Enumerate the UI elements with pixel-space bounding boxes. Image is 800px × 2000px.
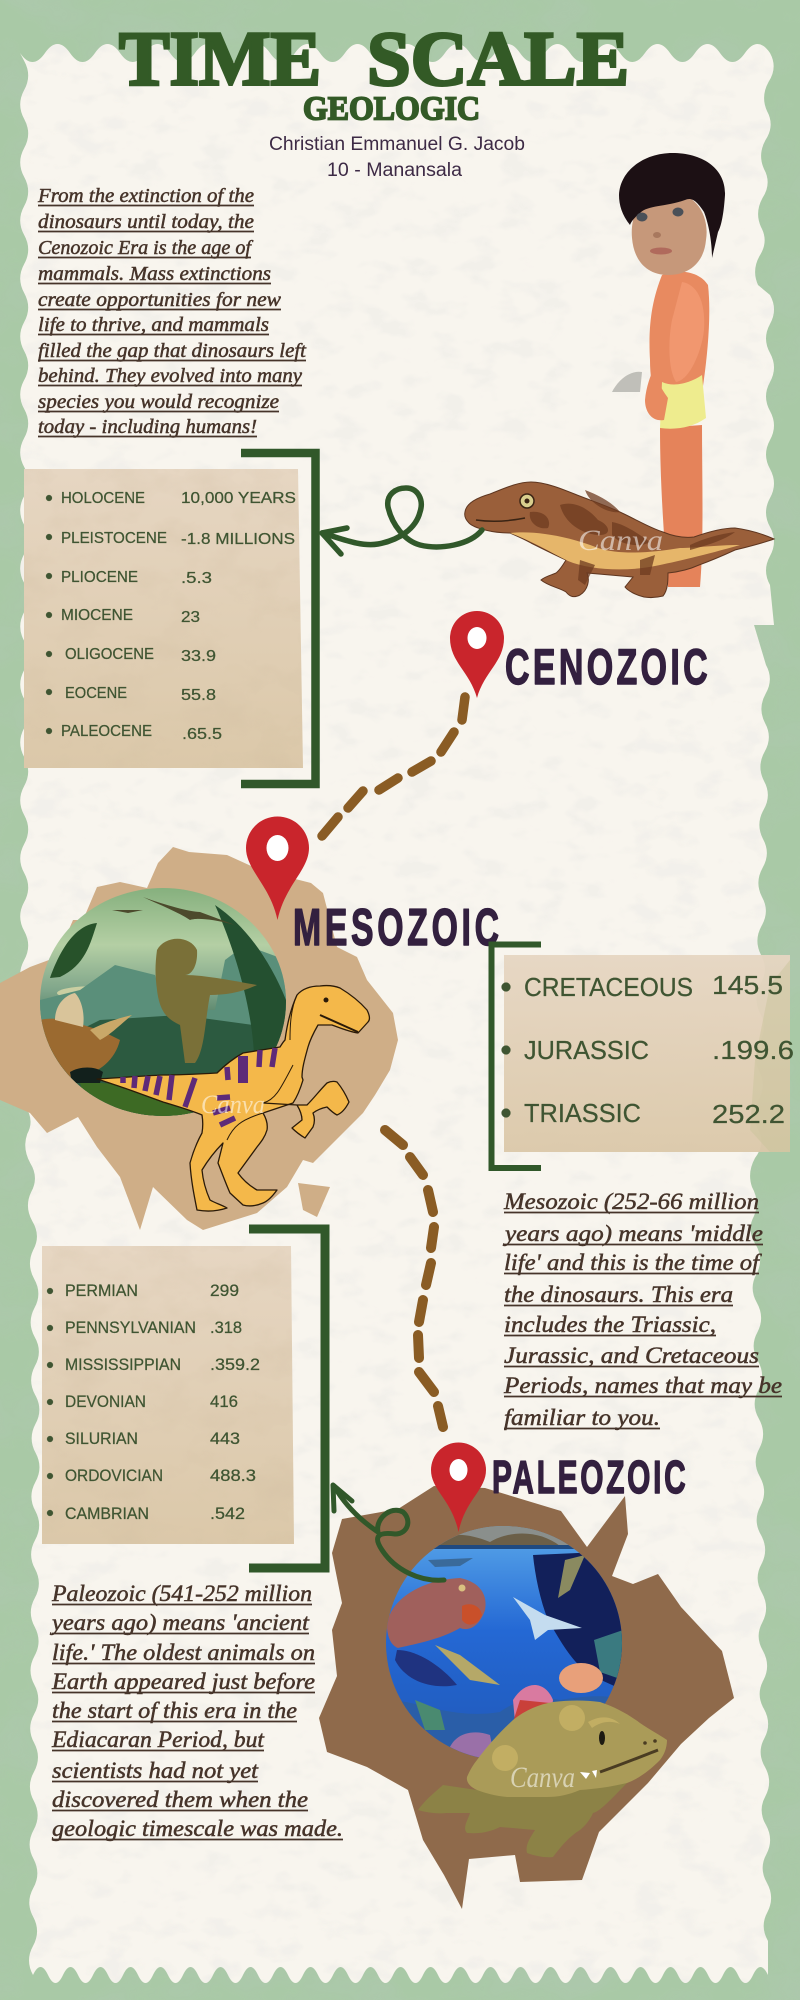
rows: periods and ages: 443: [210, 1429, 240, 1448]
text block: Mesozoic description: Mesozoic (252-66 million: [503, 1189, 759, 1215]
text block: Cenozoic description: life to thrive, and mammals: [38, 314, 269, 336]
text block: Paleozoic description: geologic timescale was made.: [52, 1816, 343, 1841]
blob: Paleozoic map shape: [319, 1486, 734, 1909]
panel background: [42, 1246, 297, 1546]
rows: periods and ages: ORDOVICIAN: [65, 1466, 163, 1485]
pin: Paleozoic: [431, 1442, 486, 1532]
rows: periods and ages: 299: [210, 1281, 239, 1300]
rows: periods and ages: 145.5: [712, 970, 783, 1000]
rows: epochs and ages: 10,000 YEARS: [181, 490, 296, 507]
rows: periods and ages: PERMIAN: [65, 1281, 138, 1300]
bracket: Mesozoic: [492, 944, 541, 1168]
text block: Mesozoic description: includes the Triassic,: [504, 1312, 716, 1338]
text block: Paleozoic description: years ago) means 'ancient: [50, 1610, 310, 1635]
text block: Cenozoic description: [37, 185, 307, 438]
rows: epochs and ages: HOLOCENE: [61, 490, 145, 507]
rows: periods and ages: DEVONIAN: [65, 1392, 146, 1411]
arrow: Cenozoic reptile to table: [322, 488, 482, 554]
rows: periods and ages: .199.6: [712, 1035, 794, 1065]
watermark: Canva: [578, 524, 663, 557]
rows: epochs and ages: -1.8 MILLIONS: [181, 531, 295, 548]
blob: Mesozoic map shape: [0, 847, 398, 1230]
pin: Mesozoic: [246, 817, 309, 920]
rows: epochs and ages: 33.9: [181, 648, 216, 665]
text block: Paleozoic description: discovered them when the: [52, 1787, 308, 1812]
rows: epochs and ages: PLEISTOCENE: [61, 530, 167, 547]
text block: Cenozoic description: mammals. Mass extinctions: [38, 263, 271, 285]
rows: periods and ages: 416: [210, 1392, 238, 1411]
author name and class: Christian Emmanuel G. Jacob: [269, 134, 525, 155]
text block: Cenozoic description: species you would recognize: [38, 391, 279, 413]
era heading: CENOZOIC: CENOZOIC: [505, 640, 708, 696]
text block: Cenozoic description: today - including humans!: [38, 416, 257, 438]
rows: periods and ages: CAMBRIAN: [65, 1504, 149, 1523]
text block: Mesozoic description: Jurassic, and Cretaceous: [504, 1343, 759, 1369]
text block: Mesozoic description: [503, 1189, 782, 1431]
text block: Paleozoic description: Earth appeared just before: [51, 1669, 315, 1694]
dashed route: Mesozoic to Paleozoic: [385, 1130, 443, 1427]
rows: epochs and ages: PALEOCENE: [61, 723, 152, 740]
rows: periods and ages: [502, 970, 794, 1129]
era heading: MESOZOIC: MESOZOIC: [293, 899, 499, 957]
illustration: yellow raptor: [97, 986, 369, 1211]
text block: Paleozoic description: scientists had not yet: [52, 1758, 259, 1783]
text block: Cenozoic description: From the extinction of the: [37, 185, 254, 207]
rows: periods and ages: PENNSYLVANIAN: [65, 1318, 196, 1337]
text block: Cenozoic description: Cenozoic Era is the age of: [38, 237, 254, 259]
text block: Paleozoic description: Paleozoic (541-252 million: [51, 1581, 312, 1606]
rows: epochs and ages: .5.3: [181, 570, 212, 587]
text block: Cenozoic description: dinosaurs until today, the: [38, 211, 254, 233]
rows: periods and ages: CRETACEOUS: [524, 972, 693, 1002]
rows: epochs and ages: [46, 490, 296, 743]
rows: periods and ages: [47, 1281, 260, 1523]
watermark: Canva: [510, 1761, 575, 1794]
rows: periods and ages: 488.3: [210, 1466, 256, 1485]
rows: periods and ages: .318: [210, 1318, 242, 1337]
bracket: Paleozoic: [249, 1229, 325, 1568]
rows: periods and ages: .542: [210, 1504, 245, 1523]
rows: epochs and ages: PLIOCENE: [61, 569, 138, 586]
text block: Cenozoic description: create opportunities for new: [38, 289, 281, 311]
rows: periods and ages: 252.2: [712, 1099, 785, 1129]
illustration: Cenozoic reptile: [465, 482, 774, 598]
bracket: Cenozoic: [241, 453, 316, 784]
illustration: boy: [612, 153, 725, 587]
arrow: Paleozoic scene to table: [333, 1485, 444, 1580]
rows: periods and ages: TRIASSIC: [524, 1098, 641, 1128]
text block: Mesozoic description: the dinosaurs. This era: [504, 1282, 733, 1308]
rows: epochs and ages: MIOCENE: [61, 607, 133, 624]
pin: Cenozoic: [450, 611, 504, 698]
rows: periods and ages: .359.2: [210, 1355, 260, 1374]
picture: undersea scene: [385, 1526, 623, 1760]
era heading: PALEOZOIC: PALEOZOIC: [492, 1453, 686, 1504]
author name and class: 10 - Manansala: [327, 160, 462, 181]
text block: Mesozoic description: life' and this is the time of: [504, 1250, 763, 1276]
panel background: [24, 469, 304, 769]
watermark: Canva: [201, 1090, 265, 1119]
text block: Paleozoic description: [50, 1581, 343, 1841]
author name and class: [269, 134, 525, 181]
text block: Paleozoic description: Ediacaran Period, but: [51, 1727, 265, 1752]
rows: periods and ages: SILURIAN: [65, 1429, 138, 1448]
era table: Paleozoic panel: [42, 1246, 297, 1546]
era table: Cenozoic panel: [24, 469, 304, 769]
text block: Paleozoic description: the start of this era in the: [52, 1698, 297, 1723]
panel background: [504, 955, 790, 1152]
rows: periods and ages: JURASSIC: [524, 1035, 649, 1065]
rows: epochs and ages: .65.5: [182, 726, 222, 743]
rows: epochs and ages: OLIGOCENE: [65, 646, 154, 663]
text block: Paleozoic description: life.' The oldest animals on: [52, 1640, 315, 1665]
text block: Cenozoic description: behind. They evolved into many: [38, 365, 303, 387]
picture: jungle scene: [40, 888, 290, 1116]
rows: periods and ages: MISSISSIPPIAN: [65, 1355, 181, 1374]
title: TIME SCALE: [119, 16, 629, 102]
title: TIME SCALE: TIME: [119, 16, 321, 102]
text block: Mesozoic description: years ago) means 'middle: [503, 1221, 763, 1247]
text block: Mesozoic description: Periods, names that may be: [503, 1373, 782, 1399]
rows: epochs and ages: 23: [181, 609, 200, 626]
era table: Mesozoic panel: [502, 955, 794, 1152]
illustration: olive reptile: [418, 1700, 667, 1857]
subtitle: GEOLOGIC: GEOLOGIC: [303, 90, 480, 128]
text block: Cenozoic description: filled the gap that dinosaurs left: [38, 340, 307, 362]
dashed route: Cenozoic to Mesozoic: [322, 697, 465, 836]
title: TIME SCALE: SCALE: [367, 16, 629, 102]
rows: epochs and ages: EOCENE: [65, 685, 127, 702]
text block: Mesozoic description: familiar to you.: [504, 1405, 660, 1431]
rows: epochs and ages: 55.8: [181, 687, 216, 704]
